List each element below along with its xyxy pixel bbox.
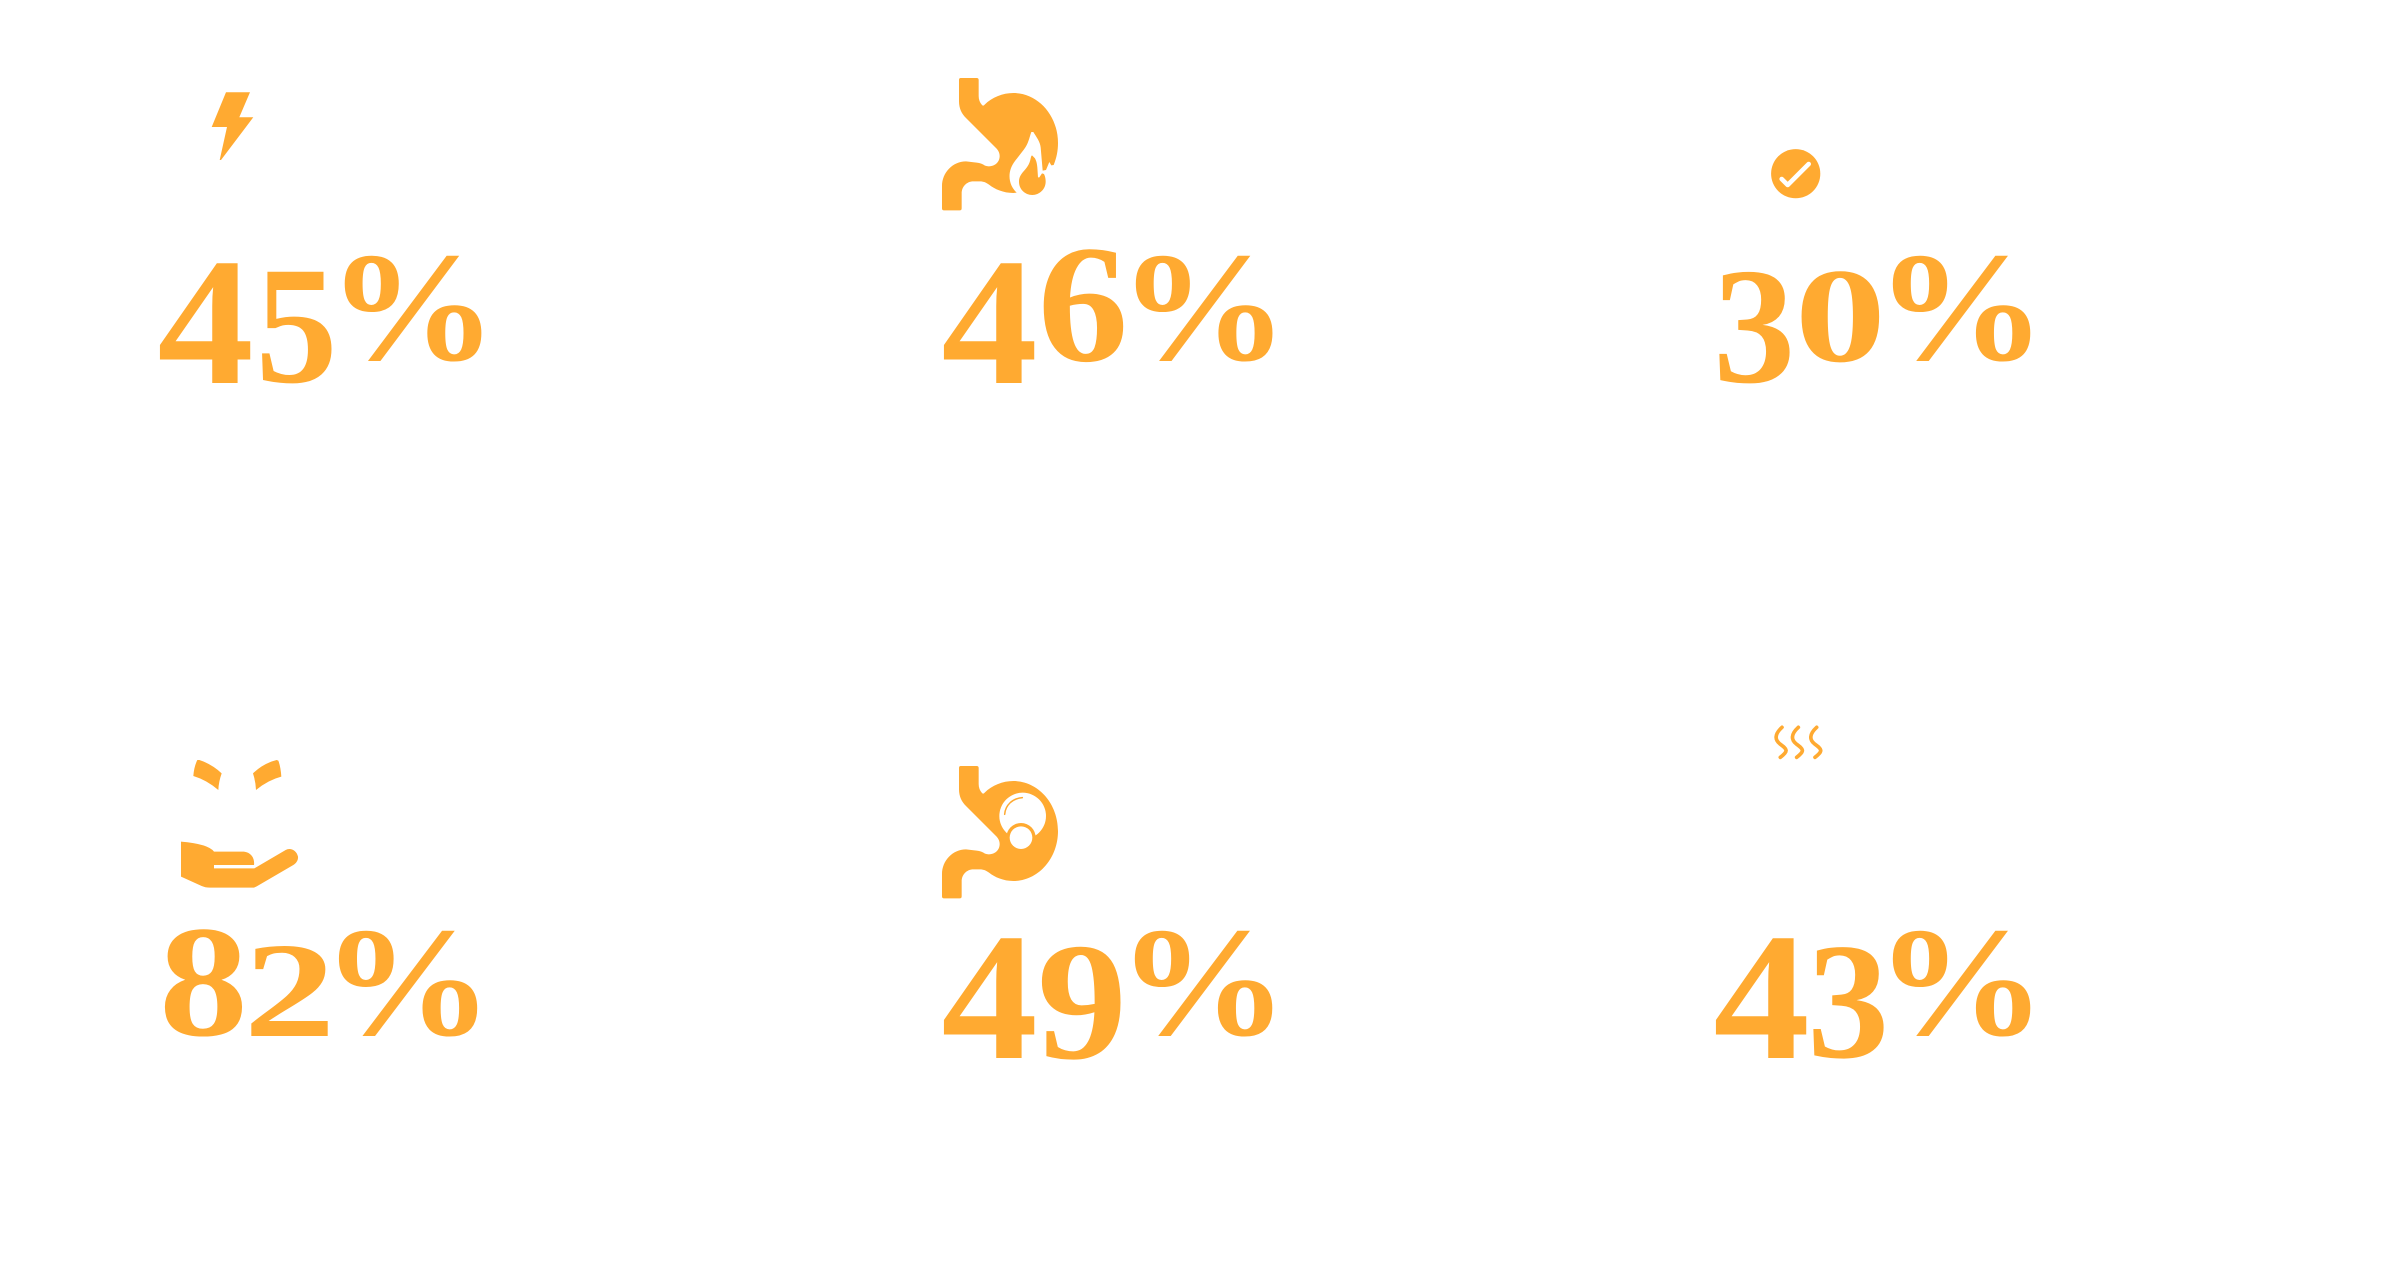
number: 82%: 8 — [159, 895, 248, 1070]
number: 30% — [1713, 221, 2046, 418]
panel: 49% stomach ulcer — [941, 766, 1288, 1098]
panel: 82% hand — [159, 760, 493, 1070]
number: 43%: 4 — [1713, 896, 1810, 1098]
number: 46% — [941, 211, 1288, 423]
icon: stomach with flame — [942, 78, 1058, 210]
number: 49%: 9 — [1037, 908, 1127, 1095]
number: 49%: % — [1117, 896, 1288, 1069]
number: 45%: % — [327, 222, 497, 394]
number: 45%: 5 — [256, 232, 337, 418]
number: 43%: 3 — [1807, 909, 1889, 1093]
panel: 30% check — [1713, 149, 2046, 418]
number: 45%: 4 — [157, 221, 254, 423]
panel: 43% steam — [1713, 727, 2046, 1098]
number: 45% — [157, 221, 497, 423]
number: 82%: % — [321, 896, 493, 1069]
number: 46%: 4 — [941, 221, 1038, 423]
number: 43% — [1713, 896, 2046, 1098]
icon: steam waves — [1776, 727, 1821, 757]
icon: lightning bolt — [212, 92, 253, 160]
number: 30%: % — [1875, 221, 2046, 394]
number: 30%: 0 — [1795, 241, 1886, 390]
number: 82% — [159, 895, 493, 1070]
icon: open hand with rays — [181, 760, 298, 888]
number: 30%: 3 — [1713, 234, 1795, 418]
number: 82%: 2 — [244, 915, 336, 1065]
number: 49%: 4 — [941, 896, 1038, 1098]
panel: 45% lightning — [157, 92, 497, 423]
panel: 46% heartburn — [941, 78, 1288, 423]
number: 46%: 6 — [1038, 211, 1128, 397]
icon: stomach with bubbles — [942, 766, 1058, 898]
icon: check circle — [1771, 149, 1820, 198]
number: 49% — [941, 896, 1288, 1098]
number: 43%: % — [1875, 896, 2046, 1069]
number: 46%: % — [1118, 222, 1288, 394]
